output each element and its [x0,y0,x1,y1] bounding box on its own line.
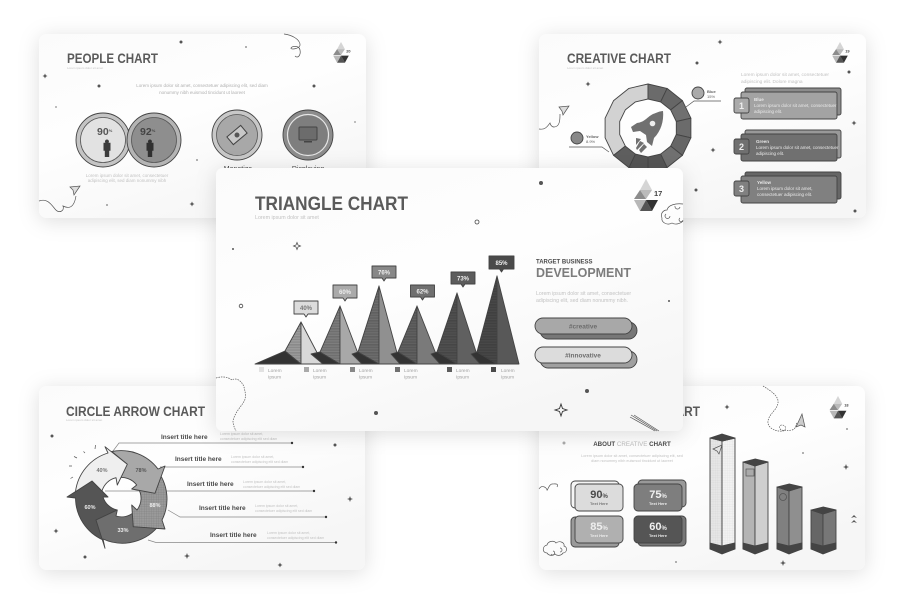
legend: Ipsum [501,374,514,380]
panel: creative chart bars [539,386,865,570]
callout: 85% [489,256,514,272]
text block: about: diam nonummy nibh euismod tincidunt ut laoreet [591,459,674,463]
logo: slide 18 [830,396,849,418]
stat card: 60%: 60% [649,521,667,533]
row: insert title 1 [161,432,293,444]
labels: arrow percentages [84,468,161,534]
icon: paper plane with trail [539,106,569,129]
text block: intro: Lorem ipsum dolor sit amet, consectetuer adipiscing elit, sed diam [136,83,268,88]
callout: 73% [451,272,475,287]
row: insert title 2 [175,455,304,468]
callout: yellow 8.9% [569,132,609,152]
stat card: 90%: 90% [590,489,608,501]
card: blue: adipiscing elit. [754,109,782,114]
logo: slide 18: 18 [844,404,849,408]
heading: creative chart partly hidden: CREATIVE CHART [596,404,701,419]
callout: 76%: 76% [378,270,391,276]
chart: overlapping people circles [76,113,181,167]
labels: arrow percentages: 40% [96,468,108,474]
card: yellow [734,172,841,203]
stat card: 75% [634,480,686,511]
callout: yellow 8.9%: Yellow [586,134,599,139]
leader lines [105,443,336,542]
heading: people chart: PEOPLE CHART [67,51,159,66]
stat card: 60% [634,516,686,546]
callout: 62% [410,285,434,300]
stat card: 85% [571,516,623,547]
pill: creative [535,318,637,339]
icon: monetize badge [212,110,262,160]
labels: arrow percentages: 88% [149,503,161,509]
logo: slide 17: 17 [654,189,662,198]
callout: blue 15% [686,87,721,107]
labels: arrow percentages: 78% [135,468,147,474]
legend: Ipsum [268,374,281,380]
bar: third [777,484,802,554]
stat card: 75%: Text Here [649,501,668,506]
chart: overlapping people circles: % [109,128,113,133]
triangle: 73% [431,293,480,364]
callout: 40% [294,301,318,317]
subtitle: circle arrow chart: Lorem ipsum dolor sit amet [66,418,102,422]
heading: creative chart: CREATIVE CHART [567,51,672,66]
text block: intro [136,83,268,95]
arrow: 78% [112,451,165,493]
decorative stars [232,181,670,416]
stat card: 90%: Text Here [590,501,609,506]
row: insert title 3 [187,480,315,492]
legend: Lorem [313,368,327,374]
card: green [734,130,841,161]
row: insert title 3: Lorem ipsum dolor sit amet, [243,480,286,484]
doodle: curl [284,34,300,57]
ticks [69,445,96,478]
legend: Ipsum [313,374,326,380]
row: insert title 3: consectetuer adipiscing elit sed diam [243,485,300,489]
arrow: 88% [132,469,167,529]
chart: circular arrows [67,447,167,548]
row: insert title 5 [210,531,337,544]
text block: about: Lorem ipsum dolor sit amet, consectetuer adipiscing elit, sed [581,454,683,458]
icon: cloud doodle [661,204,683,224]
panel: circle arrow chart [39,386,365,570]
arrow: 60% [67,481,117,540]
subtitle: creative chart: Lorem ipsum dolor sit amet [567,66,603,70]
panel: people chart [39,34,366,218]
icon: person dark [146,140,154,157]
text block: creative intro: Lorem ipsum dolor sit amet, consectetuer [741,72,829,78]
row: insert title 2: Insert title here [175,456,222,463]
icon: rocket [631,111,663,153]
icon: cloud doodle [543,541,567,555]
icon: person light [103,140,110,157]
row: insert title 5: consectetuer adipiscing elit sed diam [267,536,324,540]
callout: 85%: 85% [495,261,508,267]
decorative stars [562,404,857,566]
chart: overlapping people circles: 90 [97,126,109,138]
logo: slide 20: 20 [346,48,351,53]
legend: Ipsum [456,374,469,380]
icon: pencil doodle [630,415,659,431]
caption: people circles: adipiscing elit, sed diam nonummy nibh [88,178,167,183]
triangle: 40% [255,322,323,364]
labels: arrow percentages: 60% [84,505,96,511]
triangle: 85% [471,276,519,364]
caption: people circles: Lorem ipsum dolor sit amet, consectetuer [86,173,169,178]
callout: 76% [372,266,396,281]
chart: overlapping people circles: 92 [140,126,152,138]
pill: creative: #creative [569,324,597,330]
card: yellow: Yellow [757,180,772,185]
stat card: 85%: Text Here [590,533,609,538]
decorative stars [42,40,356,206]
stat card: 60%: Text Here [649,533,668,538]
card: green: 2 [739,142,744,152]
text block: development: Lorem ipsum dolor sit amet, consectetuer [536,291,631,297]
card: blue [734,88,841,119]
card: green: Lorem ipsum dolor sit amet, consectetuer [756,145,839,150]
bar: tall [710,434,735,554]
row: insert title 5: Lorem ipsum dolor sit amet, [267,531,310,535]
stat card: 85%: 85% [590,521,608,533]
legend: Lorem [359,368,373,374]
logo: slide 19 [832,42,850,63]
heading: development: DEVELOPMENT [536,266,631,280]
row: insert title 2: Lorem ipsum dolor sit amet, [231,455,274,459]
pill: innovative [535,347,637,368]
logo: slide 19: 19 [845,48,850,53]
chart: triangles [255,276,519,364]
legend [259,367,515,380]
legend: Ipsum [359,374,372,380]
row: insert title 4: Insert title here [199,505,246,512]
bar: short [811,507,836,554]
icon: displaying badge [283,110,333,160]
card: yellow: Lorem ipsum dolor sit amet, [757,186,813,191]
legend: Lorem [456,368,470,374]
subtitle: triangle chart: Lorem ipsum dolor sit amet [255,215,319,221]
row: insert title 4: Lorem ipsum dolor sit amet, [255,504,298,508]
legend: Lorem [404,368,418,374]
subheading: target business: TARGET BUSINESS [536,260,593,266]
baseline [255,363,519,365]
stat card: 75%: 75% [649,489,667,501]
heading: triangle chart: TRIANGLE CHART [255,194,408,215]
chart: overlapping people circles: % [152,128,156,133]
card: green: adipiscing elit. [756,151,784,156]
doodle: dashed flight path with plane [763,386,805,431]
subtitle: people chart: Lorem ipsum dolor sit amet [67,66,103,70]
row: insert title 4: consectetuer adipiscing elit sed diam [255,509,312,513]
bar: second [743,459,768,554]
legend: Lorem [501,368,515,374]
triangle: 76% [352,286,400,364]
logo: slide 20 [333,42,351,63]
text block: creative intro: adipiscing elit. Dolore magna [741,79,803,85]
labels: arrow percentages: 33% [117,528,129,534]
icon: monitor on bar [746,469,754,476]
row: insert title 3: Insert title here [187,481,234,488]
legend: Lorem [268,368,282,374]
card: yellow: 3 [739,184,744,194]
row: insert title 5: Insert title here [210,532,257,539]
row: insert title 1: consectetuer adipiscing elit sed diam [220,437,277,441]
callout: 60% [333,285,357,301]
arrow: 40% [76,447,127,492]
card: blue: Lorem ipsum dolor sit amet, consectetuer [754,103,837,108]
row: insert title 4 [199,504,327,518]
pill: innovative: #innovative [565,352,601,360]
callout: 40%: 40% [300,306,313,312]
card: yellow: consectetuer adipiscing elit. [757,192,812,197]
label: displaying: Displaying [292,166,324,173]
arrow: 33% [96,510,160,548]
texture: 88% grid [132,469,167,529]
panel: triangle chart [216,168,683,431]
row: insert title 2: consectetuer adipiscing elit sed diam [231,460,288,464]
triangle: 62% [391,306,440,364]
callout: 62%: 62% [416,290,429,296]
callout: 73%: 73% [457,276,470,282]
heading: circle arrow chart: CIRCLE ARROW CHART [66,404,206,419]
subheading: about creative chart: ABOUT CREATIVE CHART [593,441,671,448]
callout: yellow 8.9%: 8.9% [586,139,596,144]
label: monetize: Monetize [224,166,252,173]
doodle: dashed loop [216,377,245,431]
doodle: curl [539,484,558,490]
card: green: Green [756,139,769,144]
text block: development [536,291,631,304]
callout: blue 15%: 15% [707,94,715,99]
card: blue: 1 [739,101,744,111]
row: insert title 1: Lorem ipsum dolor sit amet, [220,432,263,436]
panel: creative chart [539,34,866,218]
row: insert title 1: Insert title here [161,434,208,441]
text block: about [581,454,683,463]
icon: badge on bar [780,494,786,500]
icon: paper plane with trail [39,186,80,212]
callout: blue 15%: Blue [707,89,716,94]
text block: development: adipiscing elit, sed diam nonummy nibh. [536,298,628,304]
decorative stars [586,40,856,212]
triangle: 60% [311,306,362,364]
text block: intro: nonummy nibh euismod tincidunt ut laoreet [159,90,246,95]
card: blue: Blue [754,97,764,102]
legend: Ipsum [404,374,417,380]
caption: people circles [86,173,169,183]
icon: plane on bar [713,445,722,454]
chart: segmented ring [605,84,691,172]
stat card: 90% [571,481,623,511]
callout: 60%: 60% [339,290,352,296]
logo: slide 17 [634,179,662,211]
text block: creative intro [741,72,829,85]
decorative stars [50,434,353,568]
